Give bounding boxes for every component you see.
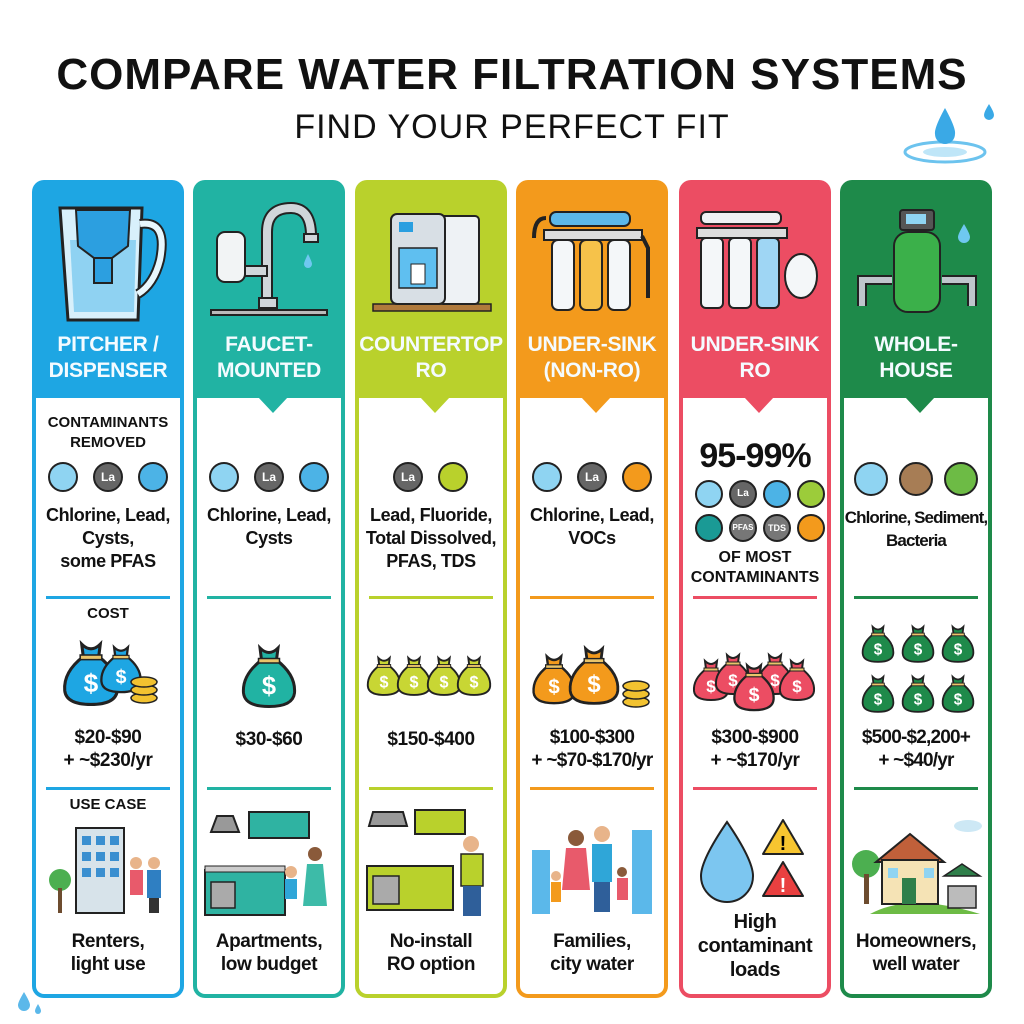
- icon: bags: [366, 655, 492, 696]
- icons: contaminants grid: TDS: [768, 523, 786, 533]
- text: use case: well water: [873, 954, 959, 975]
- panel: countertop: [355, 180, 507, 998]
- icons: contaminants: La: [585, 470, 599, 484]
- text: use case: Apartments,: [216, 931, 322, 952]
- panel: faucet: MOUNTED: [217, 359, 321, 382]
- label: cost: COST: [87, 605, 129, 622]
- text: use case: contaminant: [698, 935, 812, 957]
- panel: pitcher: PITCHER /: [57, 333, 159, 356]
- subtitle: FIND YOUR PERFECT FIT: [294, 108, 730, 146]
- icon: countertop ro: [372, 213, 492, 312]
- text: use case: Families,: [553, 931, 631, 952]
- icons: contaminants: [48, 462, 168, 492]
- icons: contaminants: [209, 462, 329, 492]
- icon: bags: [862, 624, 974, 713]
- icon: water drops splash: [904, 104, 994, 164]
- icons: contaminants grid: [695, 480, 825, 542]
- text: use case: [698, 911, 812, 981]
- text: use case: city water: [550, 954, 634, 975]
- panel: under-sink ro: RO: [740, 359, 770, 382]
- icon: kitchen family: [204, 811, 327, 916]
- text: use case: [550, 931, 634, 975]
- icons: contaminants: La: [401, 470, 415, 484]
- text: use case: [216, 931, 322, 975]
- text: contaminants: Chlorine, Sediment,: [845, 508, 987, 527]
- icon: under-sink filters: [532, 211, 650, 311]
- panel: faucet: FAUCET-: [225, 333, 313, 356]
- text: cost: [531, 727, 653, 771]
- icon: family city: [532, 826, 652, 914]
- icons: contaminants: [854, 462, 978, 496]
- icon: drop and warnings: !: [780, 833, 786, 855]
- icons: contaminants: La: [262, 470, 276, 484]
- panel: countertop: RO: [416, 359, 446, 382]
- text: contaminants: Cysts,: [82, 528, 134, 548]
- panel: whole-house: HOUSE: [879, 359, 953, 382]
- text: cost: [710, 727, 800, 771]
- icon: bottom-left drops: [18, 992, 41, 1014]
- label: contaminants: CONTAMINANTS: [48, 414, 168, 431]
- text: contaminants: [46, 505, 170, 571]
- text: of most contaminants: [691, 549, 819, 586]
- panel: under-sink ro: UNDER-SINK: [691, 333, 819, 356]
- icon: house well: [850, 808, 984, 920]
- panel: countertop: COUNTERTOP: [359, 333, 503, 356]
- icons: contaminants: La: [101, 470, 115, 484]
- icon: kitchen person: [366, 809, 484, 916]
- text: cost: $100-$300: [550, 727, 634, 748]
- icon: bag: [242, 644, 296, 708]
- text: cost: + ~$170/yr: [710, 750, 799, 771]
- icon: drop and warnings: [700, 819, 804, 903]
- text: contaminants: PFAS, TDS: [386, 551, 476, 571]
- icon: bags: [532, 645, 650, 708]
- text: contaminants: Chlorine, Lead,: [46, 505, 170, 525]
- panel: pitcher: [32, 180, 184, 998]
- text: use case: light use: [71, 954, 145, 975]
- text: cost: + ~$40/yr: [878, 750, 954, 771]
- text: cost: [64, 727, 153, 771]
- icons: contaminants: [532, 462, 652, 492]
- icon: bags: [63, 640, 158, 706]
- text: cost: + ~$70-$170/yr: [531, 750, 653, 771]
- icon: bags: [692, 652, 816, 712]
- text: contaminants: Cysts: [245, 528, 293, 548]
- panel: whole-house: [840, 180, 992, 998]
- text: contaminants: Chlorine, Lead,: [530, 505, 654, 525]
- text: use case: loads: [730, 959, 780, 981]
- text: cost: + ~$230/yr: [64, 750, 152, 771]
- panel: pitcher: DISPENSER: [49, 359, 167, 382]
- panel: faucet: [193, 180, 345, 998]
- text: use case: High: [734, 911, 776, 933]
- panel: under-sink non-ro: UNDER-SINK: [528, 333, 656, 356]
- text: contaminants: [845, 508, 987, 550]
- icon: building: [49, 827, 161, 914]
- text: cost: [840, 726, 992, 772]
- label: use case: USE CASE: [70, 796, 146, 813]
- icon: pitcher: [58, 206, 167, 322]
- text: cost: $500-$2,200+: [862, 727, 970, 748]
- icon: faucet: [210, 202, 328, 316]
- text: contaminants: [530, 505, 654, 548]
- text: of most contaminants: OF MOST: [719, 549, 791, 566]
- text: cost: $150-$400: [387, 729, 475, 750]
- panel: under-sink non-ro: [516, 180, 668, 998]
- text: percentage: 95-99%: [699, 437, 811, 475]
- text: contaminants: Lead, Fluoride,: [370, 505, 492, 525]
- icon: ro system: [696, 211, 818, 309]
- text: use case: RO option: [387, 954, 475, 975]
- panel: under-sink ro: [679, 180, 831, 998]
- text: of most contaminants: CONTAMINANTS: [691, 569, 819, 586]
- label: contaminants: REMOVED: [70, 434, 146, 451]
- text: contaminants: Total Dissolved,: [366, 528, 496, 548]
- text: use case: Homeowners,: [856, 931, 976, 952]
- text: contaminants: Bacteria: [886, 531, 946, 550]
- text: cost: $300-$900: [711, 727, 799, 748]
- panel: under-sink non-ro: (NON-RO): [544, 359, 640, 382]
- text: contaminants: Chlorine, Lead,: [207, 505, 331, 525]
- text: contaminants: [366, 505, 496, 571]
- panel: whole-house: WHOLE-: [874, 333, 958, 356]
- text: cost: $20-$90: [75, 727, 141, 748]
- label: contaminants: [48, 414, 168, 451]
- text: use case: [844, 930, 988, 976]
- icons: contaminants: [393, 462, 468, 492]
- icons: contaminants grid: La: [737, 488, 749, 499]
- icon: drop and warnings: !: [780, 875, 786, 897]
- text: contaminants: VOCs: [568, 528, 616, 548]
- text: use case: [387, 931, 475, 975]
- text: use case: No-install: [390, 931, 472, 952]
- icon: whole house tank: [857, 209, 977, 313]
- text: contaminants: some PFAS: [60, 551, 156, 571]
- text: use case: low budget: [221, 954, 317, 975]
- text: use case: [71, 931, 145, 975]
- text: use case: Renters,: [72, 931, 144, 952]
- text: contaminants: [207, 505, 331, 548]
- title: COMPARE WATER FILTRATION SYSTEMS: [56, 50, 968, 99]
- icons: contaminants grid: PFAS: [733, 523, 753, 532]
- text: cost: $30-$60: [236, 729, 302, 750]
